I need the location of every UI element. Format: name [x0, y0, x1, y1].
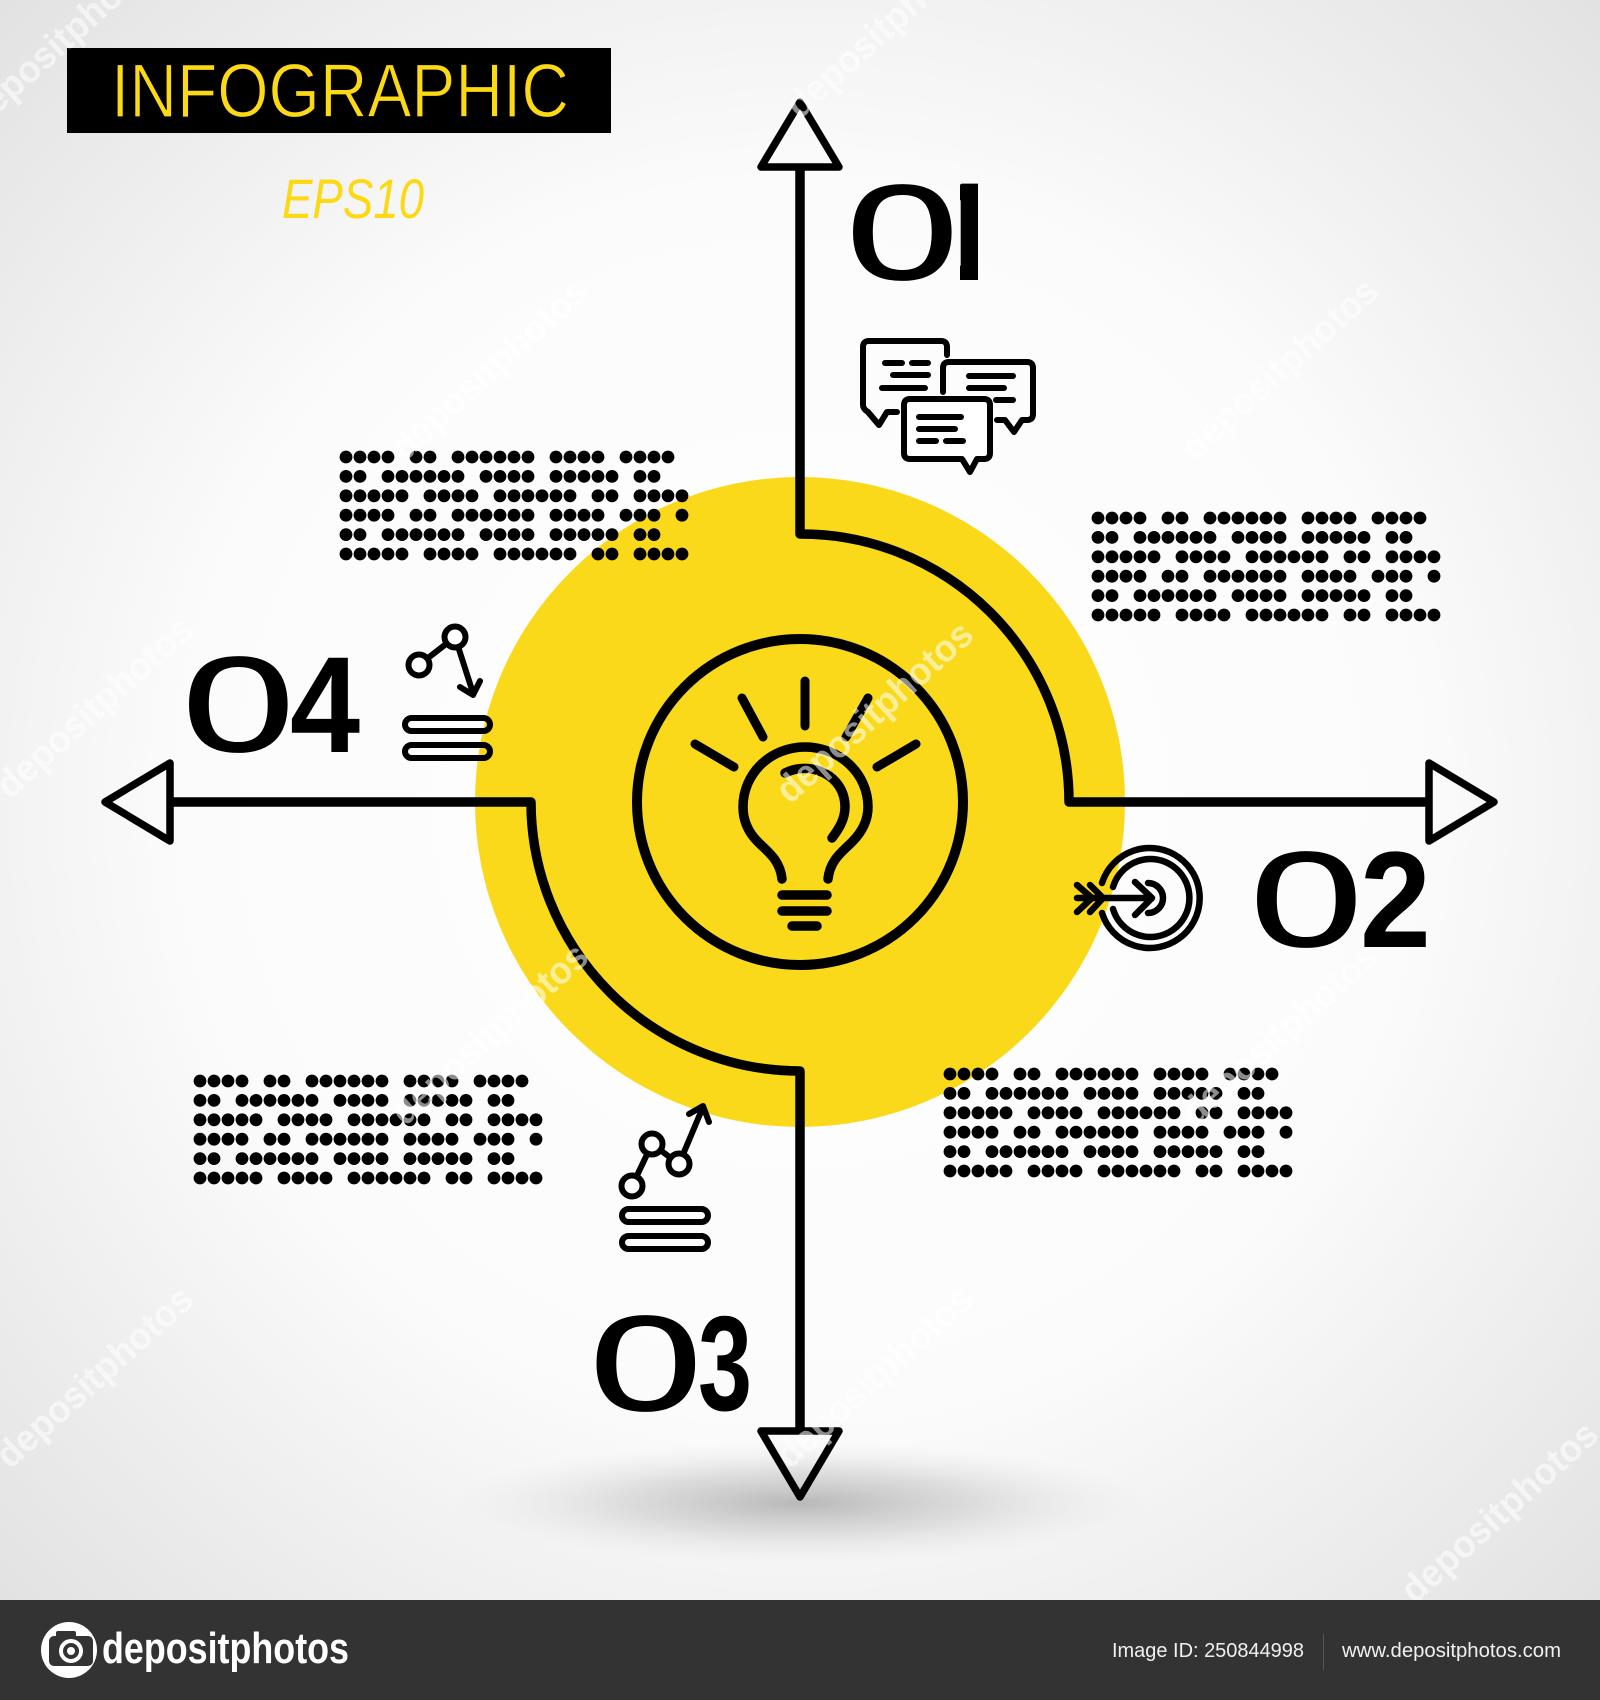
watermarks: depositphotos	[383, 935, 597, 1134]
watermarks: depositphotos	[383, 270, 597, 469]
number 03: 0	[590, 1288, 702, 1439]
arrow 03 and 04: left and bottom	[105, 763, 839, 1497]
number 04: 0	[182, 629, 295, 780]
number 02	[1250, 824, 1431, 977]
icon: target with arrow	[1077, 848, 1200, 948]
footer url: www.depositphotos.com	[1341, 1640, 1561, 1662]
subtitle: EPS10: EPS10	[282, 167, 424, 230]
icon: light bulb in ring	[637, 639, 963, 965]
text block: dotted placeholder top left	[346, 457, 682, 554]
watermarks: depositphotos	[1173, 935, 1387, 1134]
text block: dotted placeholder bottom left	[200, 1081, 536, 1178]
central yellow circle	[475, 477, 1125, 1127]
footer logo wordmark: depositphotos	[102, 1624, 349, 1673]
watermarks: depositphotos	[768, 1278, 982, 1477]
icon: rising chart with list bars	[622, 1106, 709, 1249]
footer logo icon	[41, 1622, 97, 1678]
footer image id: Image ID: 250844998	[1112, 1640, 1304, 1662]
watermarks: depositphotos	[1173, 270, 1387, 469]
number 01: 0	[846, 157, 959, 308]
number 01: 1	[928, 153, 1006, 310]
title banner: INFOGRAPHIC	[111, 49, 569, 134]
text block: dotted placeholder bottom right	[950, 1074, 1286, 1171]
footer bar	[0, 1600, 1600, 1700]
icon: descending chart with list bars	[405, 626, 490, 758]
number 04: 4	[290, 628, 360, 781]
number 01	[853, 184, 978, 281]
icon: chat bubbles	[863, 341, 1033, 472]
text block: dotted placeholder top right	[1098, 518, 1434, 615]
number 04	[182, 628, 360, 781]
arrow 01 and 02: top and right	[761, 102, 1494, 841]
number 02: 2	[1360, 824, 1431, 977]
watermarks: depositphotos	[768, 613, 982, 812]
number 02: 0	[1250, 824, 1363, 975]
floor shadow	[450, 1443, 1150, 1563]
number 03: 3	[698, 1288, 752, 1439]
number 03	[590, 1288, 752, 1439]
